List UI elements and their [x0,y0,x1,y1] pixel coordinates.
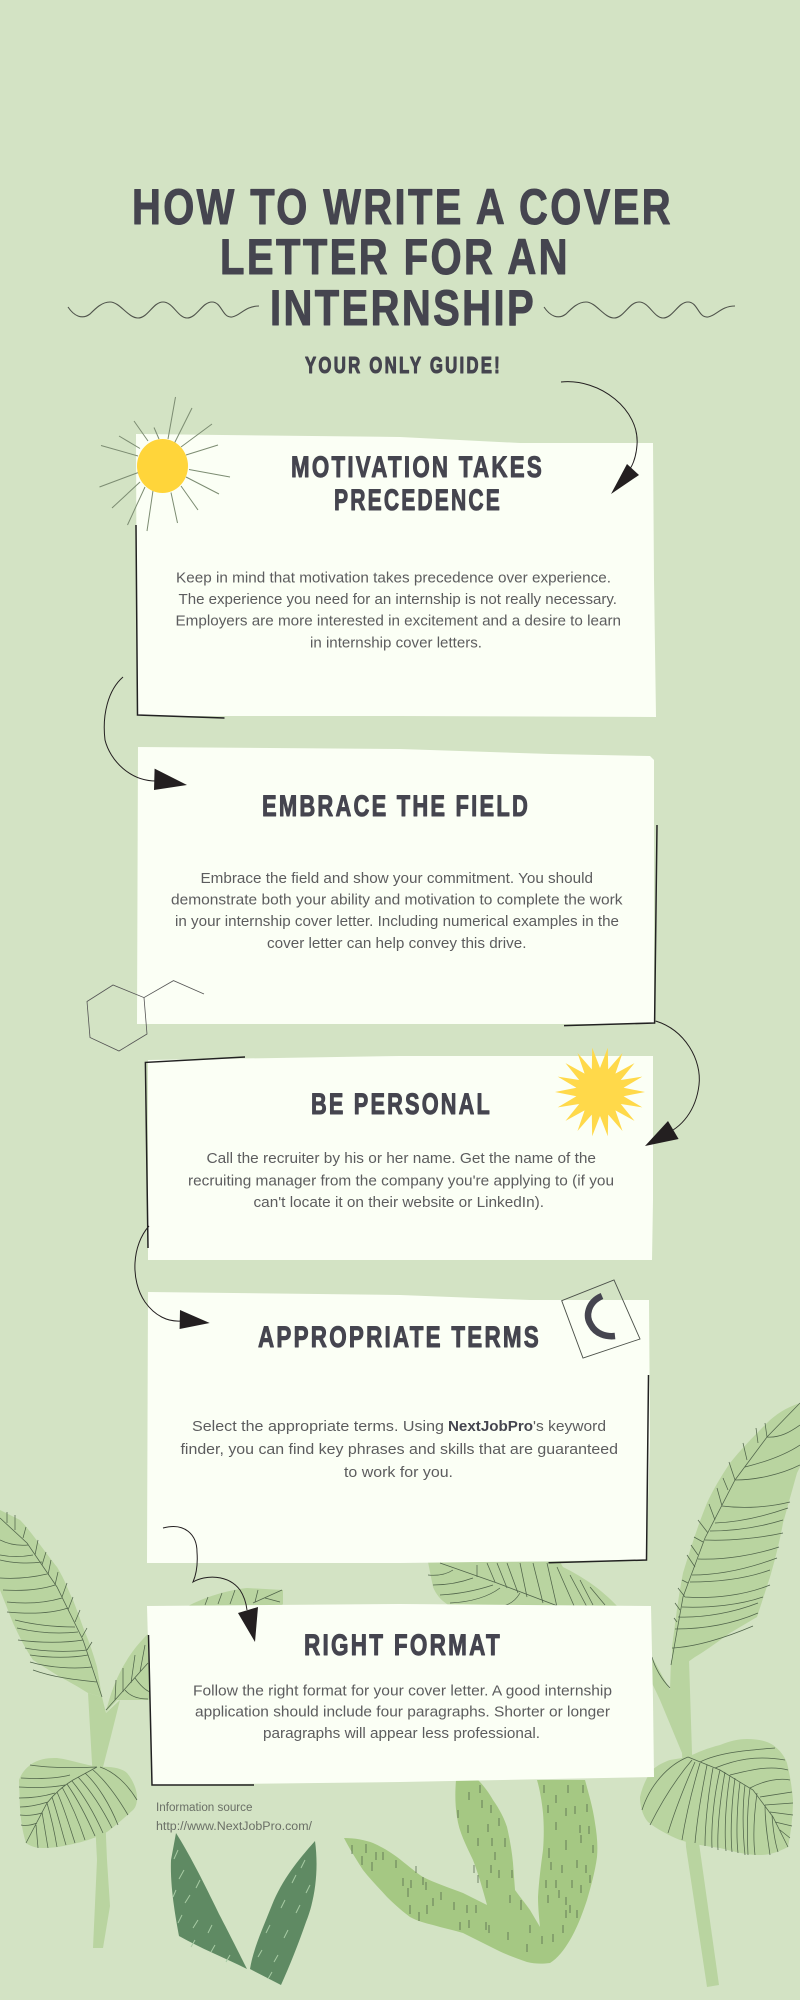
body text: embrace: cover letter can help convey this drive. [267,935,526,952]
hand-drawn border: right format [148,1635,254,1785]
body text: appropriate terms: finder, you can find key phrases and skills that are guaranteed [180,1441,618,1458]
plant: right rounded leaf [640,1739,793,1855]
heading: motivation [291,451,544,517]
hand-drawn border: be personal [145,1057,245,1248]
body text: appropriate terms [180,1418,618,1481]
panel: appropriate terms [147,1292,650,1563]
hand-drawn border: appropriate terms [548,1375,648,1563]
body text: embrace: demonstrate both your ability and motivation to complete the work [171,892,623,908]
body text: motivation: in internship cover letters. [310,634,482,652]
body text: embrace: in your internship cover letter. Including numerical examples in the [175,913,619,930]
arrow: motivation to embrace [104,677,187,790]
panel: right format [147,1604,654,1785]
wavy decoration left [68,302,259,318]
body text: be personal [188,1150,614,1211]
icon: sun with rays [100,397,230,531]
heading: motivation: PRECEDENCE [334,484,502,517]
icon: letter c in tilted square [562,1280,640,1358]
panel: motivation takes precedence [136,434,656,718]
arrow: appropriate terms to right format [163,1527,258,1642]
body text: be personal: can't locate it on their website or LinkedIn). [254,1194,544,1211]
panel: be personal [145,1056,653,1260]
title: HOW TO WRITE A COVER [132,179,673,235]
plant: left small leaf behind card [106,1588,283,1712]
hand-drawn border: motivation [136,525,224,718]
body text: right format: Follow the right format for your cover letter. A good internship [193,1682,612,1700]
heading: appropriate terms: APPROPRIATE TERMS [258,1321,541,1354]
plant: centre green shape [344,1780,597,1964]
body text: appropriate terms: Select the appropriate terms. Using [192,1418,444,1435]
body text: right format: paragraphs will appear less professional. [263,1725,540,1742]
plant: centre top leaf behind cards [428,1562,617,1608]
heading: right format: RIGHT FORMAT [304,1629,502,1662]
title [132,179,673,336]
plant: left rounded leaf [19,1758,137,1848]
body text: right format [193,1682,612,1742]
arrow: be personal to appropriate terms [135,1226,210,1329]
panel: embrace the field [137,747,657,1026]
body text: appropriate terms: 's keyword [533,1418,606,1435]
plant: right large leaf and stem [652,1403,800,1987]
body text: be personal: Call the recruiter by his or her name. Get the name of the [206,1150,596,1167]
icon: molecule hexagon [87,981,204,1051]
subtitle: YOUR ONLY GUIDE! [305,352,502,378]
body text: right format: application should include four paragraphs. Shorter or longer [195,1704,610,1720]
arrow: embrace to be personal [645,1021,699,1146]
title: LETTER FOR AN [220,229,570,285]
wavy decoration right [544,302,735,318]
title: INTERNSHIP [270,280,536,336]
information source: Information source [156,1802,252,1814]
heading: embrace: EMBRACE THE FIELD [262,790,530,823]
body text: appropriate terms: to work for you. [344,1464,453,1481]
plant: left large leaf and stem [0,1510,120,1948]
plant: dark green twin leaves [171,1833,317,1985]
heading: motivation: MOTIVATION TAKES [291,451,544,484]
heading: be personal: BE PERSONAL [311,1088,492,1121]
body text: motivation: Keep in mind that motivation takes precedence over experience. [176,570,611,586]
information source [156,1802,313,1833]
body text: motivation [176,570,621,652]
body text: motivation: Employers are more interested in excitement and a desire to learn [176,612,621,630]
icon: starburst [555,1048,645,1136]
arrow: title to motivation [561,382,639,494]
body text: embrace: Embrace the field and show your commitment. You should [200,870,593,887]
body text: embrace [171,870,623,952]
body text: appropriate terms: NextJobPro [448,1418,533,1435]
information source: http://www.NextJobPro.com/ [156,1821,313,1833]
hand-drawn border: embrace [564,825,657,1026]
body text: be personal: recruiting manager from the company you're applying to (if you [188,1172,614,1190]
body text: motivation: The experience you need for an internship is not really necessary. [178,591,617,608]
